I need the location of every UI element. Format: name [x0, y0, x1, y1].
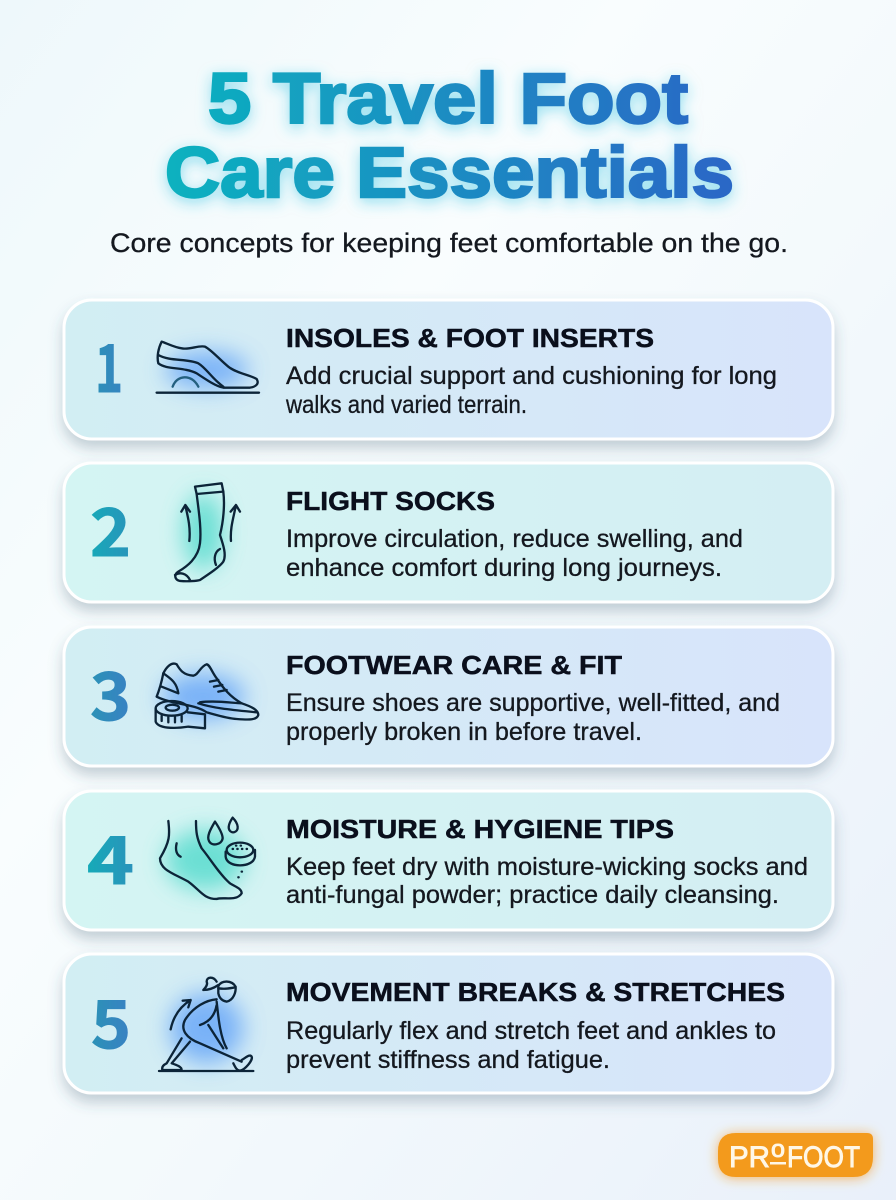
heading: MOVEMENT BREAKS & STRETCHES [286, 977, 785, 1007]
description [286, 689, 780, 746]
number 2: 2 [90, 480, 131, 576]
description: Keep feet dry with moisture-wicking socks and [286, 853, 808, 881]
subtitle: Core concepts for keeping feet comfortable on the go. [110, 228, 788, 258]
heading: MOISTURE & HYGIENE TIPS [286, 814, 674, 844]
logo: PROFOOT: FOOT [787, 1141, 860, 1174]
title: Care Essentials [165, 134, 734, 213]
panel: moisture and hygiene tips [64, 791, 833, 930]
description: prevent stiffness and fatigue. [286, 1046, 610, 1074]
panel: movement breaks and stretches [64, 954, 833, 1093]
description [286, 853, 808, 909]
number 5: 5 [91, 972, 131, 1068]
icon: sneaker and measuring tape [156, 664, 258, 728]
description: Add crucial support and cushioning for long [286, 362, 777, 390]
icon: person stretching [159, 978, 253, 1071]
description: properly broken in before travel. [286, 718, 642, 746]
description: Regularly flex and stretch feet and ankles to [286, 1017, 776, 1045]
logo: PROFOOT [718, 1133, 873, 1177]
icon: foot with drops and powder [160, 818, 255, 899]
logo: PROFOOT: o [771, 1136, 785, 1163]
description [286, 1017, 776, 1074]
heading: FLIGHT SOCKS [286, 486, 495, 516]
panel: insoles and foot inserts [64, 300, 833, 439]
description: Improve circulation, reduce swelling, and [286, 525, 743, 553]
description: anti-fungal powder; practice daily cleansing. [286, 881, 779, 909]
title: 5 Travel Foot [208, 60, 688, 139]
description [285, 362, 777, 419]
number 3: 3 [90, 644, 131, 740]
number 4: 4 [87, 808, 134, 904]
description: walks and varied terrain. [285, 391, 527, 419]
icon: compression sock with arrows [175, 483, 240, 581]
title [165, 60, 734, 213]
heading: INSOLES & FOOT INSERTS [286, 323, 654, 353]
panel: flight socks [64, 463, 833, 602]
description: enhance comfort during long journeys. [286, 554, 722, 582]
panel: footwear care and fit [64, 627, 833, 766]
number 1: 1 [95, 316, 123, 412]
icon: shoe with arch insert [157, 342, 259, 393]
logo: PROFOOT: PR [729, 1141, 770, 1174]
description [286, 525, 743, 582]
description: Ensure shoes are supportive, well-fitted, and [286, 689, 780, 717]
heading: FOOTWEAR CARE & FIT [286, 650, 622, 680]
